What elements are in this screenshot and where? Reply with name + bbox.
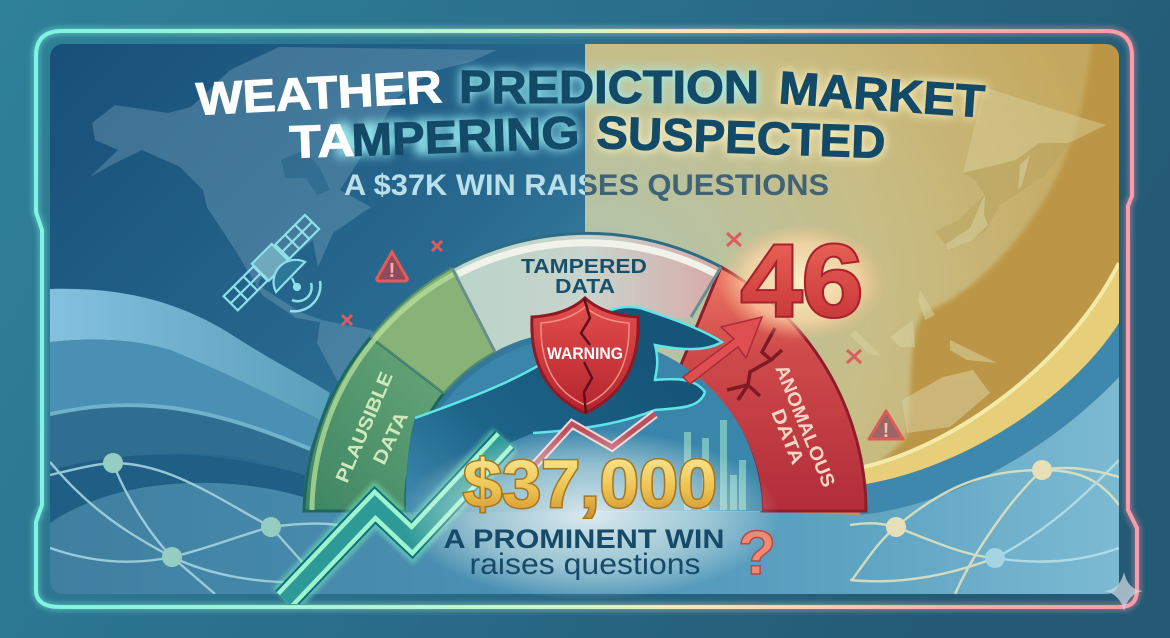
title: WEATHER: [195, 60, 443, 125]
red arrow: [683, 317, 762, 384]
callout: a prominent win: [444, 524, 724, 581]
gauge label: plausible data: PLAUSIBLE: [332, 369, 398, 486]
title: MARKET: [777, 61, 986, 127]
title: TA: [289, 114, 355, 168]
icon: warning triangle right: !: [883, 420, 889, 442]
icons: red x marks: [342, 233, 861, 363]
map: North America: [90, 47, 496, 381]
gauge label: tampered data: [521, 256, 647, 298]
icon: corner sparkle: [1104, 572, 1143, 611]
bar chart: [684, 420, 746, 510]
waves: left: [50, 288, 330, 497]
gauge label: anomalous data: DATA: [766, 406, 808, 468]
panel: gauge: [304, 233, 866, 511]
title: MARKET: [777, 61, 986, 127]
title: SUSPECTED: [596, 106, 886, 168]
bottom wave band: [50, 377, 1119, 594]
subtitle: A $37K WIN RAISES QUESTIONS: [344, 169, 829, 202]
network nodes: [103, 453, 1052, 568]
waves: right: [860, 263, 1119, 515]
warning shield: [532, 298, 638, 413]
big number: $37,000: $37,000: [463, 446, 717, 522]
gauge label: tampered data: TAMPERED: [521, 256, 647, 278]
title: [195, 60, 986, 168]
glow behind winnings: [400, 430, 780, 600]
icon: warning triangle left: [377, 252, 407, 282]
gauge: plausible segment: [304, 337, 444, 511]
title: PREDICTION: [459, 61, 759, 113]
gauge label: plausible data: [332, 369, 413, 486]
hand reaching for gauge: [406, 307, 722, 510]
icon: question mark: ?: [738, 519, 776, 588]
map: Asia and Australia: [850, 87, 1106, 433]
inner gauge disc: [406, 336, 762, 511]
warning shield: WARNING: [547, 344, 623, 363]
gauge cracks: [727, 328, 782, 400]
gauge: anomalous segment: [680, 267, 866, 511]
callout: a prominent win: raises questions: [470, 548, 700, 581]
title: PREDICTION: [459, 61, 759, 113]
icon: warning triangle left: !: [389, 260, 395, 282]
gauge label: anomalous data: ANOMALOUS: [770, 362, 839, 490]
gauge: light green segment: [371, 268, 495, 393]
title: SUSPECTED: [596, 106, 886, 168]
big number: 46: 46: [741, 224, 863, 338]
gauge: tampered segment: [452, 233, 721, 352]
network lines: [50, 462, 360, 594]
gauge label: plausible data: DATA: [370, 408, 413, 468]
title: MPERING: [351, 106, 580, 166]
icon: satellite: [222, 213, 320, 311]
subtitle: A $37K WIN RAISES QUESTIONS: [344, 169, 829, 202]
gauge label: tampered data: DATA: [555, 276, 615, 298]
red zigzag line: [530, 414, 655, 470]
callout: a prominent win: A PROMINENT WIN: [444, 524, 724, 554]
title: MPERING: [334, 105, 580, 166]
green rising arrow: [285, 440, 505, 600]
glow behind 46: [718, 224, 886, 340]
icon: warning triangle right: [869, 411, 903, 442]
map: light disc: [585, 44, 1092, 465]
